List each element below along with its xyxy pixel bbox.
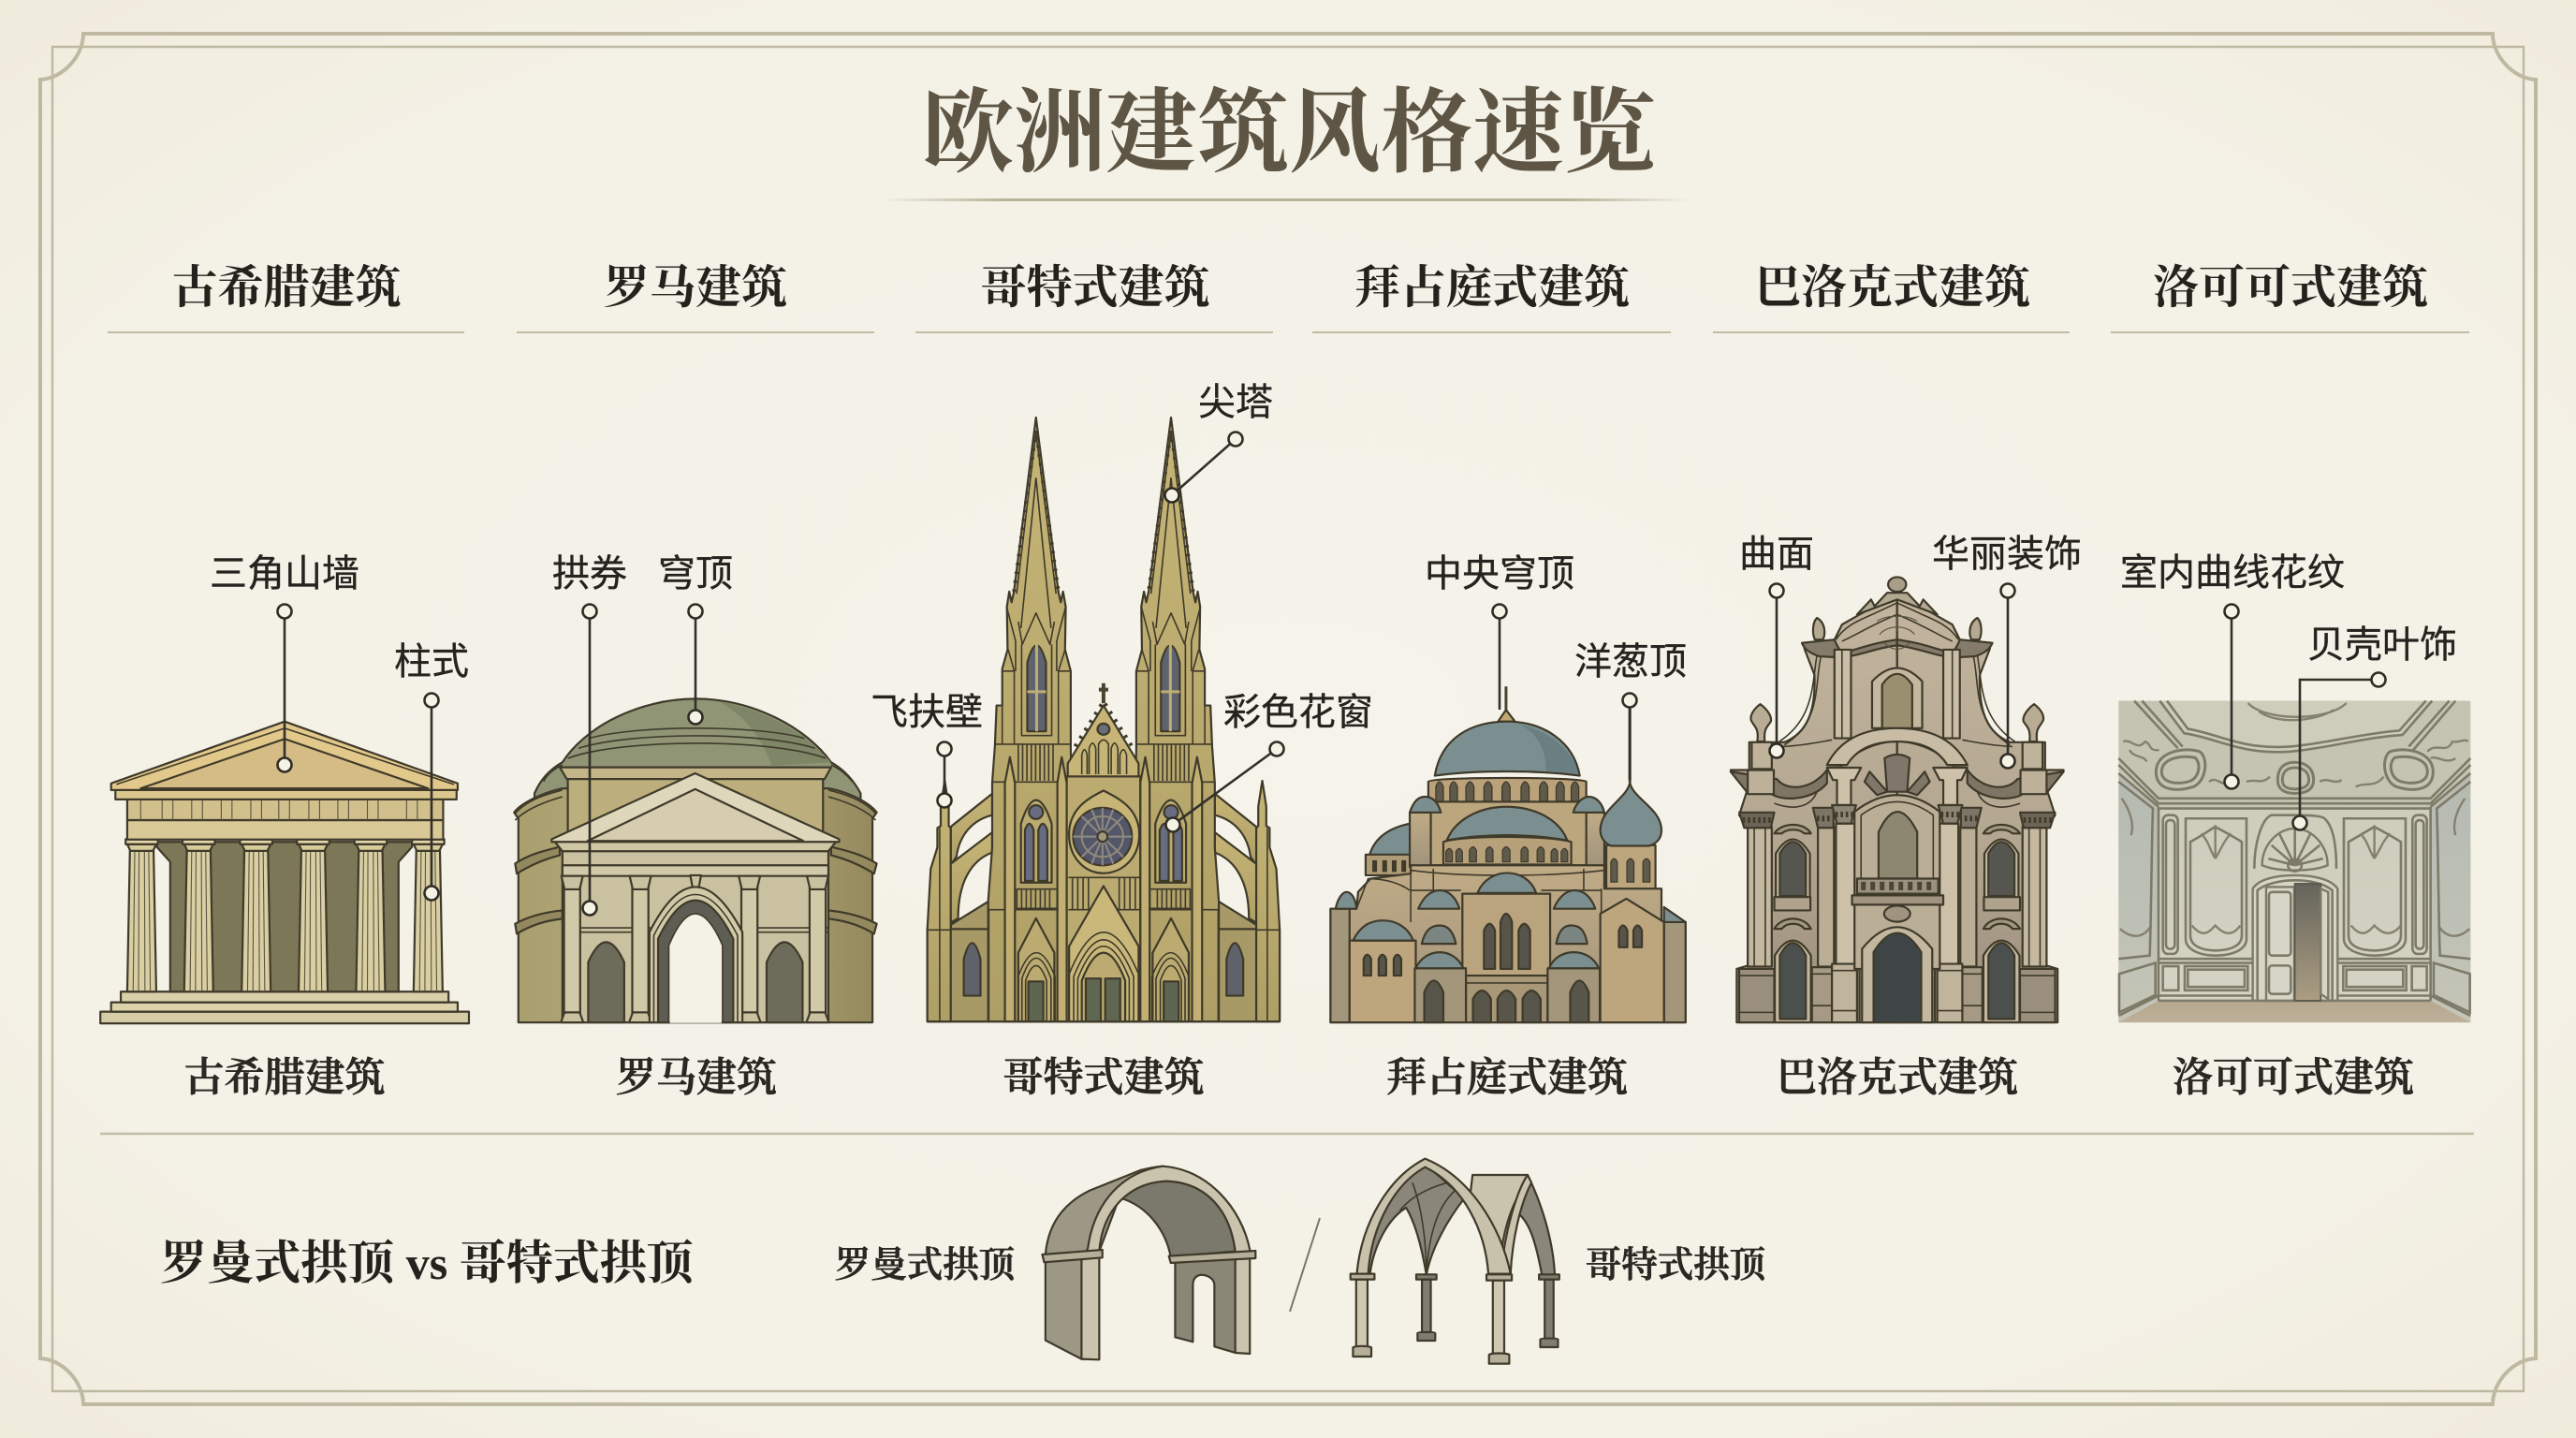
callout: 曲面: 曲面	[1739, 534, 1814, 575]
callout: 华丽装饰	[1932, 534, 2082, 768]
callout: 洋葱顶: 洋葱顶	[1574, 641, 1687, 682]
callout: 三角山墙: 三角山墙	[210, 553, 359, 594]
callout: 贝壳叶饰: 贝壳叶饰	[2307, 624, 2457, 666]
building captions: 古希腊建筑	[183, 1056, 386, 1101]
callout: 拱券	[552, 553, 627, 916]
label: 哥特式拱顶: 哥特式拱顶	[1586, 1245, 1767, 1285]
comparison heading: 罗曼式拱顶 vs 哥特式拱顶	[160, 1237, 696, 1289]
column headers	[108, 262, 2469, 332]
callout: 穹顶	[658, 553, 733, 725]
illustration: Greek temple	[100, 722, 469, 1023]
column headers: 拜占庭式建筑	[1354, 262, 1630, 313]
icon: Gothic rib vault	[1351, 1159, 1559, 1364]
callout: 柱式	[394, 641, 469, 901]
callout: 洋葱顶	[1574, 641, 1687, 780]
column headers: 哥特式建筑	[980, 262, 1210, 313]
illustration: Roman Pantheon	[514, 698, 877, 1023]
building captions: 罗马建筑	[616, 1056, 777, 1101]
callout: 曲面	[1739, 534, 1814, 758]
column headers: 古希腊建筑	[171, 262, 402, 313]
callout: 穹顶: 穹顶	[658, 553, 733, 594]
callout: 彩色花窗: 彩色花窗	[1223, 692, 1373, 733]
callout: 飞扶壁	[871, 692, 983, 807]
callout: 贝壳叶饰	[2293, 624, 2457, 829]
callout: 飞扶壁: 飞扶壁	[871, 692, 983, 733]
callout: 尖塔	[1164, 382, 1273, 502]
building captions: 哥特式建筑	[1003, 1056, 1204, 1101]
building captions	[183, 1056, 2414, 1101]
callout: 室内曲线花纹	[2120, 552, 2345, 788]
callout: 室内曲线花纹: 室内曲线花纹	[2120, 552, 2345, 594]
illustration: Byzantine church	[1330, 686, 1686, 1022]
callout: 华丽装饰: 华丽装饰	[1932, 534, 2082, 575]
illustration: Rococo interior	[2118, 701, 2470, 1022]
title underline	[880, 198, 1692, 201]
callout: 彩色花窗	[1166, 692, 1373, 831]
callout: 中央穹顶: 中央穹顶	[1425, 553, 1574, 594]
column headers: 罗马建筑	[604, 262, 787, 313]
callout: 中央穹顶	[1425, 553, 1574, 710]
icon: Romanesque arch	[1043, 1167, 1255, 1359]
callout: 拱券: 拱券	[552, 553, 627, 594]
building captions: 洛可可式建筑	[2173, 1056, 2414, 1101]
callout: 柱式: 柱式	[394, 641, 469, 682]
illustration: Baroque facade	[1731, 577, 2064, 1022]
column headers: 洛可可式建筑	[2153, 262, 2428, 313]
building captions: 巴洛克式建筑	[1777, 1056, 2018, 1101]
callout: 三角山墙	[210, 553, 359, 771]
divider slash	[1290, 1218, 1320, 1312]
column headers: 巴洛克式建筑	[1755, 262, 2030, 313]
illustration: Gothic cathedral	[928, 418, 1280, 1021]
title: 欧洲建筑风格速览	[922, 83, 1656, 184]
label: 罗曼式拱顶: 罗曼式拱顶	[835, 1245, 1017, 1285]
section divider	[100, 1133, 2474, 1135]
callout: 尖塔: 尖塔	[1198, 382, 1273, 423]
building captions: 拜占庭式建筑	[1386, 1056, 1628, 1101]
